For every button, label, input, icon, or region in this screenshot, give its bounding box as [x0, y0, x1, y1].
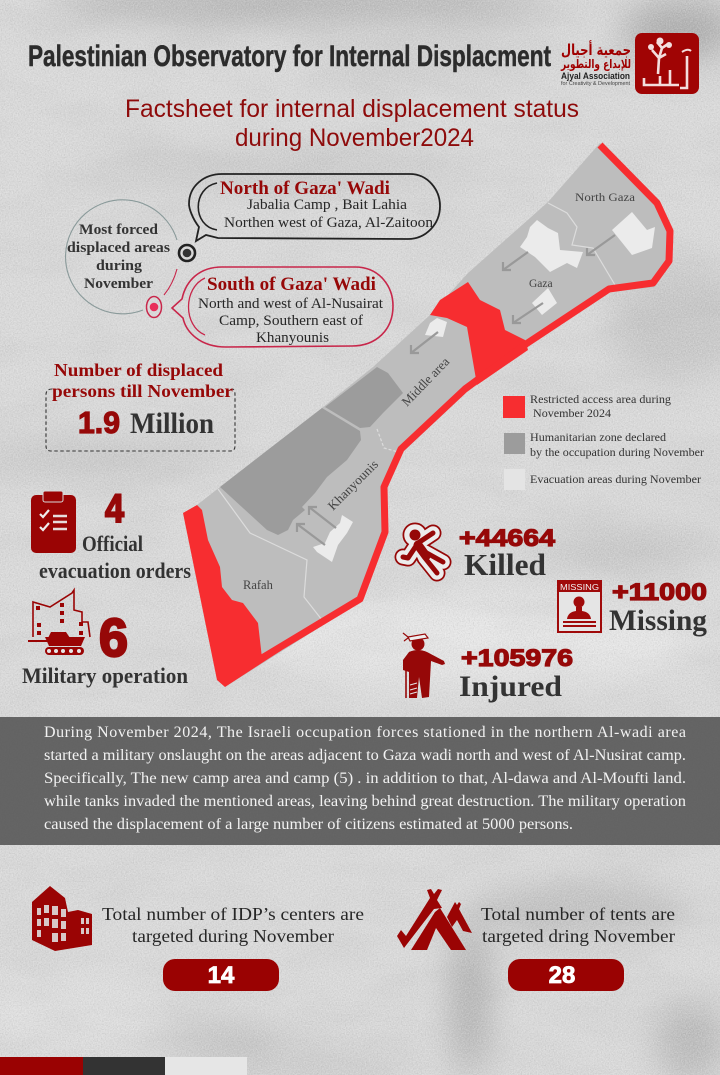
circle heading: November: [84, 276, 154, 292]
narrative text: Specifically, The new camp area and camp (5) . in addition to that, Al-dawa and Al-Moufti land.: [44, 770, 686, 787]
panel: injured: [403, 633, 573, 703]
label: Military operation: [22, 663, 188, 688]
panel: evacuation orders: [31, 487, 191, 583]
value: 6: 6: [99, 608, 128, 668]
value: 1.9: [78, 405, 120, 440]
legend: restricted: [503, 392, 671, 420]
label: Missing: [609, 604, 707, 637]
label: Rafah: Rafah: [243, 578, 274, 592]
map of Gaza: [183, 143, 673, 687]
panel: IDP centers: [32, 886, 364, 991]
panel: tents: [397, 889, 675, 991]
footer colour bar: [0, 1057, 247, 1075]
panel: number of displaced persons: persons till November: [52, 381, 233, 401]
icon: injured person: [403, 633, 445, 698]
icon: tank and ruined buildings: [28, 590, 90, 655]
panel: tents: targeted dring November: [482, 926, 675, 946]
circle heading: during: [96, 258, 143, 274]
icon: building: [32, 886, 92, 951]
icon: tents: [397, 889, 472, 950]
logo Arabic tagline: للإبداع والتطوير: [560, 57, 631, 72]
circle heading: displaced areas: [67, 240, 170, 256]
legend: restricted: Restricted access area during: [530, 392, 671, 406]
connector arc: [164, 269, 177, 295]
legend: evacuation areas: [504, 469, 701, 490]
displacement arrows: [297, 235, 615, 545]
icon: missing poster: MISSING: [560, 583, 599, 592]
circle heading: [67, 222, 170, 292]
callout: north of Gaza wadi: [189, 174, 440, 241]
value: 4: 4: [105, 487, 125, 531]
callout: south of Gaza wadi: North and west of Al-Nusairat: [198, 296, 383, 312]
panel: killed: [403, 525, 556, 582]
callout: south of Gaza wadi: Camp, Southern east of: [219, 313, 363, 329]
subtitle: during November2024: [235, 124, 474, 152]
label: Injured: [459, 670, 562, 703]
panel: evacuation orders: evacuation orders: [39, 558, 191, 583]
panel: narrative band: [0, 717, 720, 845]
logo Arabic name: جمعية أجيال: [561, 40, 631, 59]
label: Killed: [464, 547, 546, 582]
governorate boundaries: [218, 203, 615, 620]
legend: [503, 392, 704, 490]
value: +105976: [461, 645, 573, 672]
label: Khanyounis: Khanyounis: [325, 457, 381, 513]
unit: Million: [130, 407, 214, 440]
narrative text: [44, 724, 686, 833]
icon: missing poster: [558, 581, 601, 632]
legend: humanitarian zone: [504, 430, 704, 459]
subtitle: Factsheet for internal displacement status: [125, 95, 579, 123]
heading: Number of displaced: [54, 360, 223, 380]
label: Middle area: Middle area: [398, 354, 452, 409]
icon: clipboard: [31, 491, 76, 553]
logo English tagline: for Creativity & Development: [561, 81, 631, 87]
title: Palestinian Observatory for Internal Displacment: [28, 40, 551, 73]
label: Gaza: Gaza: [529, 278, 553, 290]
narrative text: started a military onslaught on the areas adjacent to Gaza wadi north and west of Al-Nusirat camp.: [44, 747, 686, 764]
description: Total number of tents are: [481, 904, 675, 924]
value pill: [508, 959, 624, 991]
logo: Ajyal Association: [560, 33, 699, 94]
legend: evacuation areas: Evacuation areas during November: [530, 472, 701, 486]
callout: south of Gaza wadi: [172, 267, 393, 347]
legend: humanitarian zone: Humanitarian zone declared: [530, 430, 666, 444]
humanitarian zone: [220, 367, 403, 535]
legend: humanitarian zone: by the occupation during November: [530, 445, 704, 459]
value pill: [163, 959, 279, 991]
evacuation areas: [313, 212, 655, 562]
panel: IDP centers: targeted during November: [132, 926, 334, 946]
circle outline: [66, 200, 177, 314]
subtitle: [125, 95, 579, 152]
callout: south of Gaza wadi: Khanyounis: [256, 330, 329, 346]
label: Official: [82, 531, 143, 556]
narrative text: caused the displacement of a large number of citizens estimated at 5000 persons.: [44, 816, 573, 833]
panel: missing: [558, 579, 707, 637]
restricted border strip: [262, 145, 670, 658]
dashed frame: [46, 389, 235, 451]
callout: north of Gaza wadi: Northen west of Gaza, Al-Zaitoon: [224, 215, 434, 231]
label: North Gaza: North Gaza: [575, 192, 635, 204]
narrative text: while tanks invaded the mentioned areas, leaving behind great destruction. The military operation: [44, 793, 686, 810]
value: +44664: [459, 525, 556, 552]
callout: north of Gaza wadi: Jabalia Camp , Bait Lahia: [247, 197, 408, 213]
panel: most forced displaced areas: [66, 174, 440, 347]
value: +11000: [612, 579, 707, 606]
panel: military operation: [22, 590, 188, 688]
narrative text: During November 2024, The Israeli occupation forces stationed in the northern Al-wadi area: [44, 724, 686, 741]
legend: restricted: November 2024: [533, 406, 611, 420]
description: Total number of IDP’s centers are: [102, 904, 364, 924]
value pill: 28: [549, 962, 575, 989]
callout: south of Gaza wadi: South of Gaza' Wadi: [207, 274, 376, 295]
logo badge: [635, 33, 699, 94]
restricted access areas: [183, 282, 528, 687]
value pill: 14: [208, 962, 235, 989]
red bullet: [146, 296, 162, 318]
panel: number of displaced persons: [46, 360, 235, 451]
black bullet: [179, 245, 195, 261]
circle heading: Most forced: [79, 222, 158, 238]
callout: north of Gaza wadi: North of Gaza' Wadi: [220, 178, 390, 199]
icon: body outline: [403, 530, 443, 573]
land area: [197, 143, 673, 687]
logo English name: Ajyal Association: [561, 71, 630, 82]
